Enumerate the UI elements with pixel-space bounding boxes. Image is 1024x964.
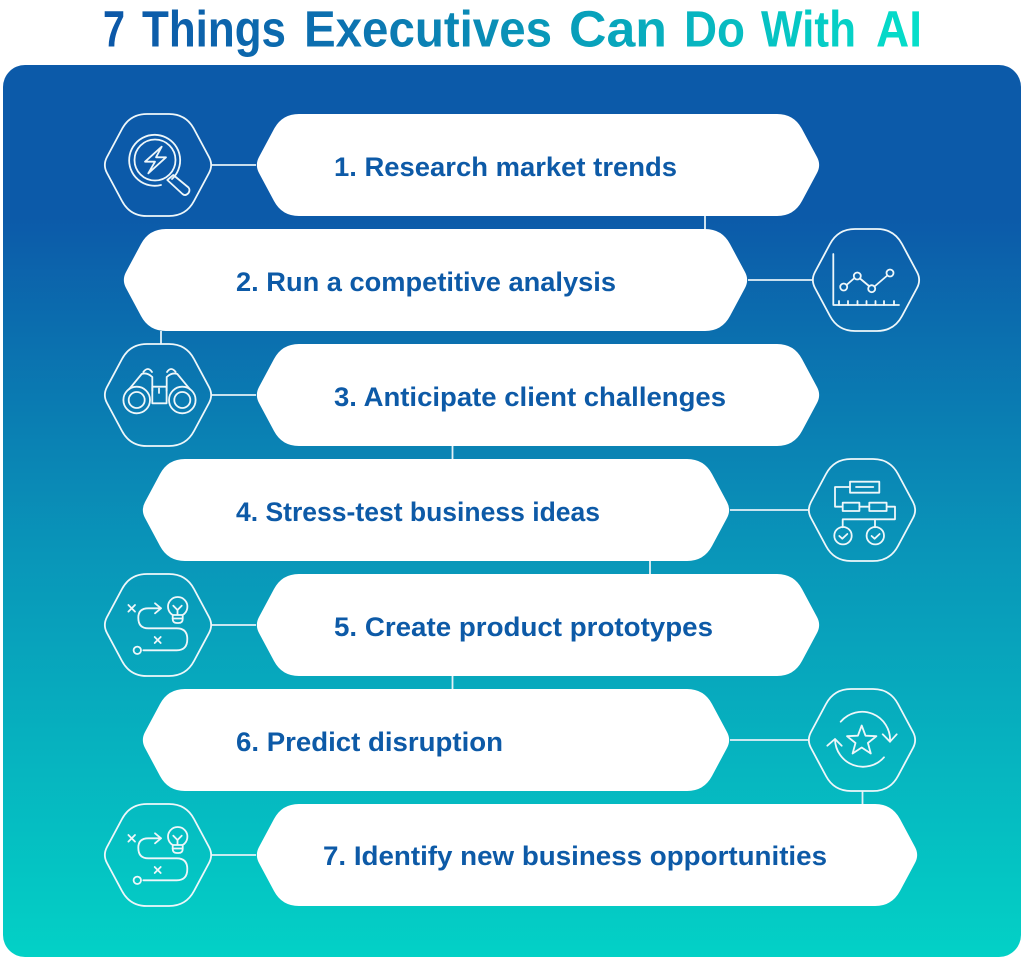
icon: line chart [813,229,919,331]
step 2: run a competitive analysis: 2. Run a competitive analysis [236,267,616,297]
icon: binoculars [105,344,211,446]
icon: winding path to light bulb [105,574,211,676]
title: Executives [304,0,552,58]
icon: winding path to light bulb (second) [105,804,211,906]
title: With [761,0,856,58]
step 7: identify new business opportunities: 7. Identify new business opportunities [323,841,827,871]
title: Things [142,0,286,58]
icon: flowchart [809,459,915,561]
step 7: identify new business opportunities [257,804,917,906]
step 1: research market trends [257,114,819,216]
step 1: research market trends: 1. Research market trends [334,152,677,182]
title: Do [684,0,745,58]
title: Can [569,0,667,58]
step 5: create product prototypes [257,574,819,676]
connectors between steps and icons [161,165,862,855]
icon: magnifying glass with lightning bolt [105,114,211,216]
title [103,0,922,58]
step 4: stress-test business ideas: 4. Stress-test business ideas [236,497,600,527]
step 3: anticipate client challenges: 3. Anticipate client challenges [334,382,726,412]
step 6: predict disruption: 6. Predict disruption [236,727,503,757]
title: 7 [103,0,125,58]
title: AI [876,0,922,58]
step 6: predict disruption [143,689,729,791]
step 5: create product prototypes: 5. Create product prototypes [334,612,713,642]
icon: star with circular arrows [809,689,915,791]
step 4: stress-test business ideas [143,459,729,561]
step 2: run a competitive analysis [124,229,747,331]
step 3: anticipate client challenges [257,344,819,446]
